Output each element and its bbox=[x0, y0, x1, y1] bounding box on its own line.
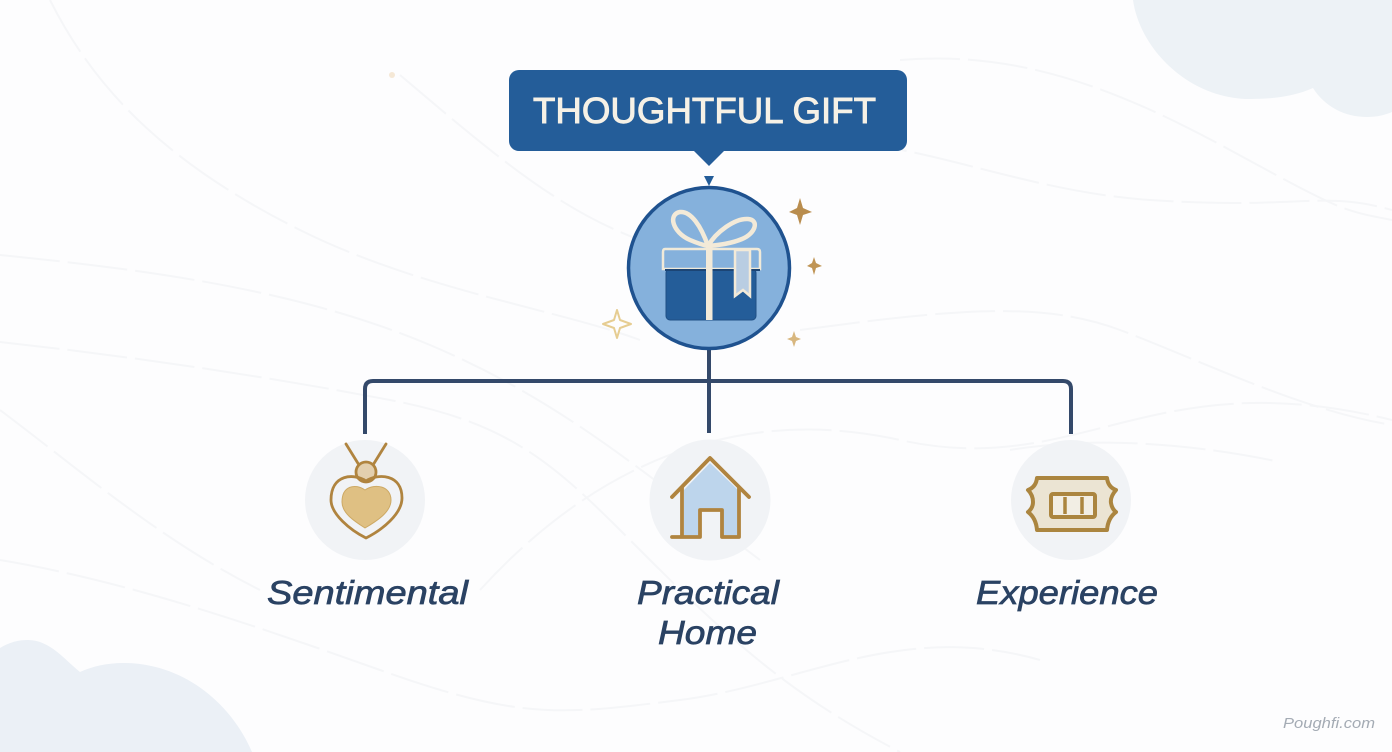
panel: experience bbox=[976, 440, 1158, 611]
sparkle top right bbox=[789, 198, 812, 225]
decorative cloud: top right bbox=[1133, 0, 1392, 117]
icon backdrop bbox=[650, 440, 770, 560]
panel: sentimental bbox=[267, 440, 470, 611]
ribbon vertical bbox=[706, 247, 712, 320]
sparkles bbox=[603, 198, 822, 347]
label: Home bbox=[658, 614, 757, 651]
bow bbox=[673, 212, 755, 246]
icon: ticket bbox=[1028, 478, 1116, 530]
gift body bbox=[666, 269, 756, 320]
watermark: Poughfi.com bbox=[1283, 715, 1375, 732]
icon backdrop bbox=[305, 440, 425, 560]
label: Sentimental bbox=[267, 574, 470, 611]
ribbon tail bbox=[735, 250, 750, 296]
label: Experience bbox=[976, 574, 1158, 611]
icon backdrop bbox=[1011, 440, 1131, 560]
icon: gift in circle bbox=[628, 188, 790, 348]
decorative dot bbox=[389, 72, 395, 78]
connector tree bbox=[365, 350, 1071, 434]
icon: house bbox=[672, 458, 749, 537]
label bbox=[637, 574, 781, 651]
title text: THOUGHTFUL GIFT bbox=[533, 90, 876, 131]
panel: practical home bbox=[637, 440, 781, 651]
gift lid bbox=[663, 249, 760, 269]
label: Practical bbox=[637, 574, 781, 611]
sparkle left bbox=[603, 310, 631, 338]
decorative cloud: bottom left bbox=[0, 640, 252, 752]
sparkle right bbox=[807, 257, 822, 275]
sparkle lower right bbox=[787, 331, 801, 347]
small arrow pointer bbox=[704, 176, 714, 186]
title banner bbox=[509, 70, 907, 166]
icon: heart necklace bbox=[331, 444, 402, 538]
